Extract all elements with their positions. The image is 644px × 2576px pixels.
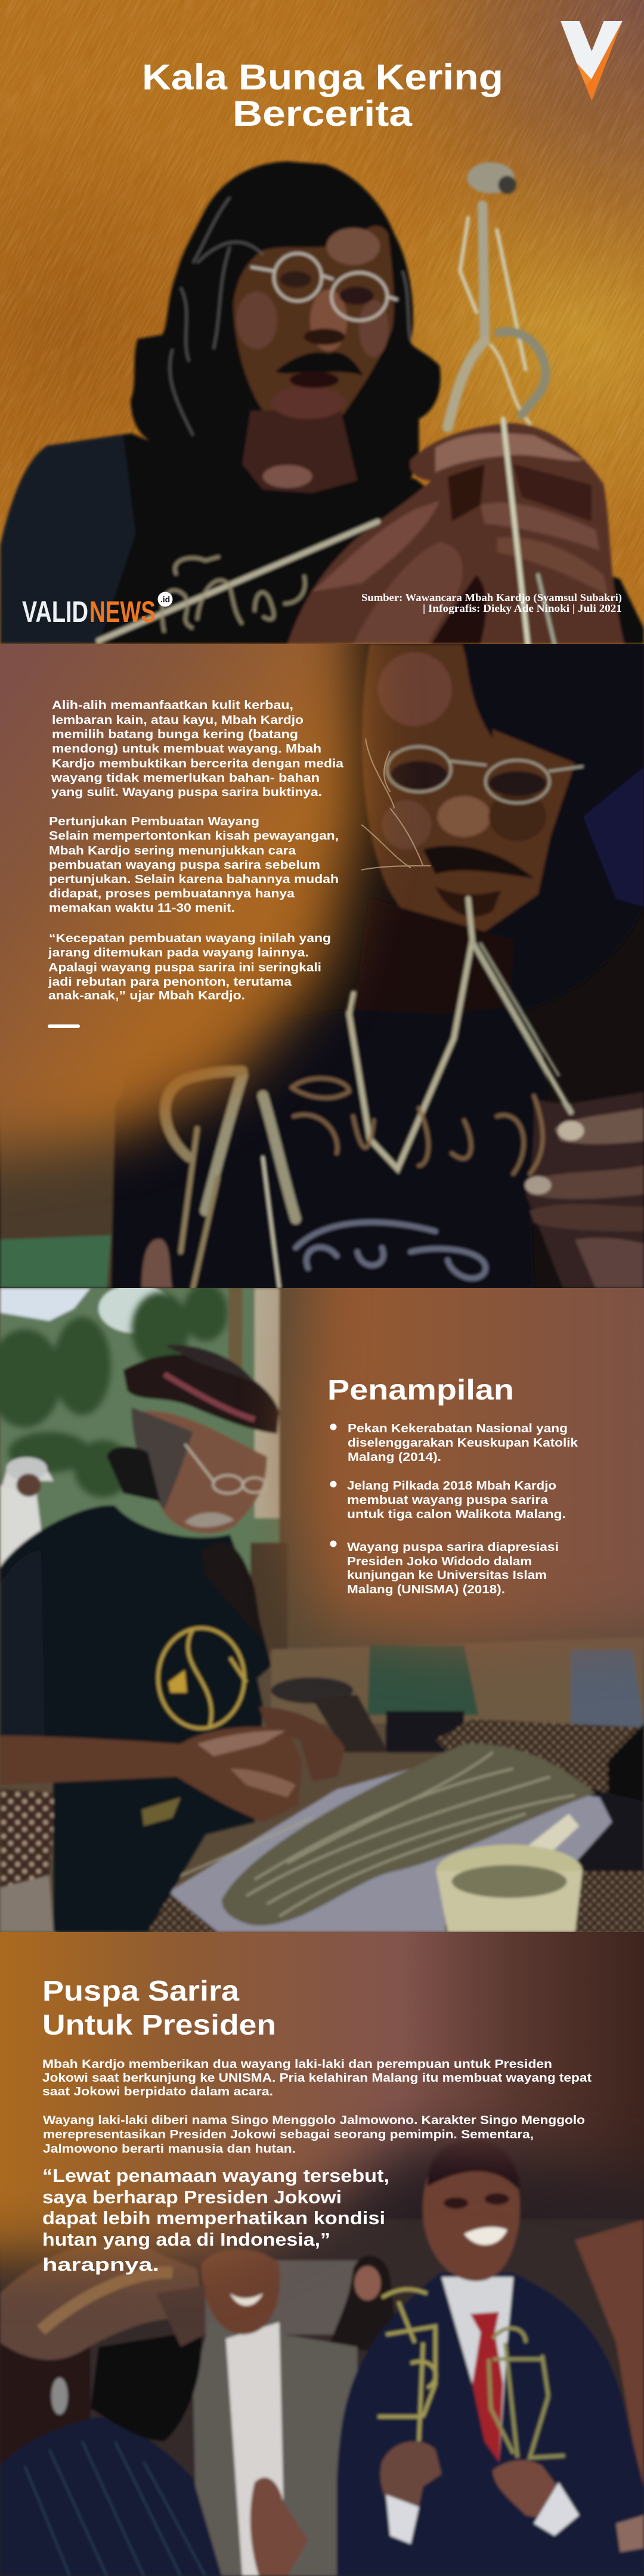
text block: intro paragraph: Kardjo membuktikan bercerita dengan media [52,757,344,770]
callout: quote: hutan yang ada di Indonesia,” [42,2229,330,2250]
gradient overlay behind text [0,1932,644,2293]
Jokowi suit [337,2273,644,2576]
text block: making performance paragraph [49,815,339,915]
logo: VALIDNEWS.id [22,592,173,628]
bullet list: performances: membuat wayang puspa sarira [347,1493,549,1507]
bullet list: performances: Jelang Pilkada 2018 Mbah Kardjo [347,1479,556,1493]
portrait illustration: man with puppet [0,162,644,644]
source credit: Sumber: Wawancara Mbah Kardjo (Syamsul Subakri) [361,592,622,603]
text block: intro paragraph [51,698,344,799]
background stool, people and table [271,1637,644,1723]
heading: Puspa Sarira Untuk Presiden: Untuk Presiden [42,2010,276,2041]
text block: making performance paragraph: pembuatan wayang puspa sarira sebelum [49,858,320,872]
panel: performance section photo [0,1288,644,1932]
logo: VALIDNEWS.id: VALID [22,595,88,628]
puppets [378,2289,565,2458]
callout: quote [42,2165,389,2275]
panel: wayang making section photo [0,644,644,1288]
source credit [361,592,622,614]
bullet list: performances: Malang (UNISMA) (2018). [347,1583,505,1596]
photo: man with puppet in mouth [0,644,644,1288]
icon: V logo top right [561,21,623,101]
text block: quote paragraph: jarang ditemukan pada wayang lainnya. [48,946,309,959]
woman in hijab [329,2256,415,2355]
gradient overlay behind text [259,1288,644,1676]
man with headcloth [0,2417,222,2576]
text block: intro paragraph: mendong) untuk membuat wayang. Mbah [52,742,321,756]
text block: making performance paragraph: Selain mempertontonkan kisah pewayangan, [49,829,339,843]
photo: man weaving dried stems [0,1284,644,1932]
bullet list: performances: untuk tiga calon Walikota Malang. [347,1507,566,1521]
text block: making performance paragraph: Pertunjukan Pembuatan Wayang [49,815,259,828]
title [142,57,503,134]
photo: Jokowi holding puppets [0,2140,644,2576]
text block: intro paragraph: memilih batang bunga kering (batang [52,727,298,741]
man [0,1505,271,1932]
text block: intro paragraph: wayang tidak memerlukan bahan- bahan [51,771,320,785]
text block: intro paragraph: lembaran kain, atau kayu, Mbah Kardjo [52,713,304,727]
panel: title portrait section [0,0,644,644]
text block: puppet name meaning: Wayang laki-laki diberi nama Singo Menggolo Jalmowono. Karakter Singo Menggolo [43,2113,585,2127]
man in grey jacket [193,2322,357,2576]
text block: quote paragraph: “Kecepatan pembuatan wayang inilah yang [49,931,331,945]
title: Kala Bunga Kering [142,57,503,97]
logo: VALIDNEWS.id: .id [160,595,170,604]
text block: gift to the president: Mbah Kardjo memberikan dua wayang laki-laki dan perempuan untuk Presiden [42,2057,552,2071]
bullet list: performances: Malang (2014). [348,1450,441,1464]
text block: quote paragraph [48,931,331,1002]
bullet list: performances: kunjungan ke Universitas Islam [347,1568,547,1582]
panel: president section photo [0,1932,644,2576]
text block: gift to the president: Jokowi saat berkunjung ke UNISMA. Pria kelahiran Malang itu membuat wayang tepat [42,2071,592,2085]
bullet list: performances [330,1422,578,1596]
text block: puppet name meaning [43,2113,585,2156]
dried flowers on cheek [361,738,431,870]
bullet list: performances: Presiden Joko Widodo dalam [347,1555,532,1568]
text block: intro paragraph: Alih-alih memanfaatkan kulit kerbau, [52,698,293,712]
arms and hands [0,1727,302,1822]
text block: intro paragraph: yang sulit. Wayang puspa sarira buktinya. [51,785,322,799]
text block: making performance paragraph: memakan waktu 11-30 menit. [49,901,235,915]
bullet list: performances: Pekan Kekerabatan Nasional yang [348,1422,568,1435]
text block: making performance paragraph: pertunjukan. Selain karena bahannya mudah [49,872,339,886]
heading: Puspa Sarira Untuk Presiden: Puspa Sarira [42,1976,239,2007]
gradient overlay behind text [0,644,401,1190]
heading: Penampilan: Penampilan [327,1374,514,1406]
text block: puppet name meaning: merepresentasikan Presiden Jokowi sebagai seorang pemimpin. Sementara, [43,2128,534,2141]
callout: quote: harapnya. [42,2254,159,2275]
text block: gift to the president [42,2057,592,2098]
bullet list: performances: Wayang puspa sarira diapresiasi [347,1540,559,1554]
callout: quote: saya berharap Presiden Jokowi [42,2187,342,2207]
source credit: | Infografis: Dieky Ade Ninoki | Juli 2021 [423,602,622,614]
white rule [48,1024,80,1028]
logo: VALIDNEWS.id: NEWS [89,595,156,628]
text block: making performance paragraph: Mbah Kardjo sering menunjukkan cara [49,844,296,857]
callout: quote: dapat lebih memperhatikan kondisi [42,2207,385,2228]
text block: puppet name meaning: Jalmowono berarti manusia dan hutan. [43,2142,296,2156]
bullet list: performances: diselenggarakan Keuskupan Katolik [348,1436,578,1450]
text block: making performance paragraph: didapat, proses pembuatannya hanya [49,887,295,900]
text block: quote paragraph: jadi rebutan para penonton, terutama [48,975,292,989]
text block: quote paragraph: anak-anak,” ujar Mbah Kardjo. [48,989,245,1002]
callout: quote: “Lewat penamaan wayang tersebut, [42,2165,389,2186]
text block: gift to the president: saat Jokowi berpidato dalam acara. [42,2085,273,2098]
text block: quote paragraph: Apalagi wayang puspa sarira ini seringkali [48,961,321,974]
heading: Puspa Sarira Untuk Presiden [42,1976,276,2041]
title: Bercerita [233,94,413,134]
